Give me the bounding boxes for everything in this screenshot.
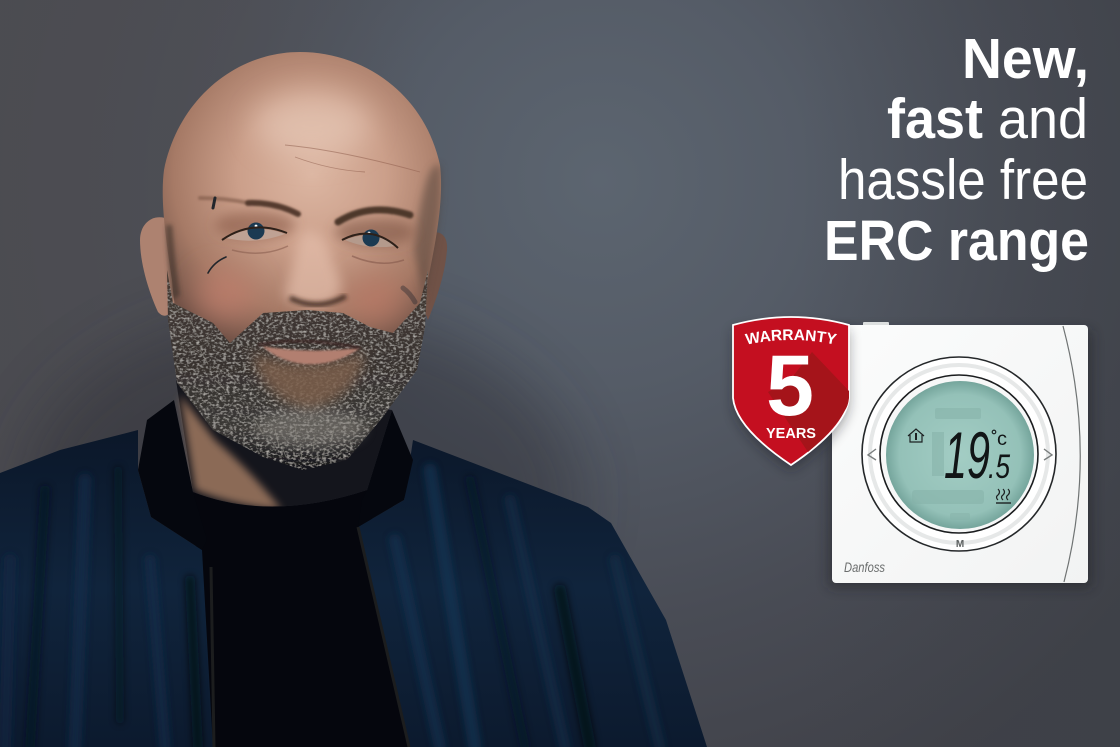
grey chin hairs xyxy=(255,408,365,448)
nose xyxy=(284,231,346,306)
shield xyxy=(733,317,849,465)
line: fast and: fast and xyxy=(887,87,1088,151)
right eye xyxy=(342,230,404,263)
thermostat xyxy=(828,322,1092,588)
zipper left xyxy=(211,567,214,747)
soul patch brown area xyxy=(252,352,365,410)
left ear xyxy=(140,217,175,316)
scar marks xyxy=(208,198,415,302)
Danfoss logo: Danfoss xyxy=(844,559,885,575)
WARRANTY: WARRANTY xyxy=(744,329,838,344)
ghost LCD segments xyxy=(912,408,984,520)
line: ERC range: ERC range xyxy=(824,209,1089,273)
eyebrows xyxy=(200,198,410,222)
ribbed collar xyxy=(138,400,413,550)
dial arrows xyxy=(868,449,1052,460)
dial xyxy=(862,357,1056,551)
warranty badge xyxy=(728,316,857,472)
heat icon xyxy=(996,489,1011,503)
head xyxy=(163,52,441,450)
headline xyxy=(824,27,1089,273)
jacket xyxy=(0,430,707,747)
cheek hair strands xyxy=(190,320,395,460)
head left sideburn shading xyxy=(166,225,180,300)
zipper right xyxy=(358,527,409,747)
head right shading xyxy=(414,165,441,300)
temperature reading: c xyxy=(997,429,1007,450)
forehead wrinkles xyxy=(285,145,420,172)
line: New,: New, xyxy=(962,27,1089,91)
left eye xyxy=(222,222,288,253)
jacket folds xyxy=(5,470,660,747)
top tab xyxy=(863,322,889,327)
numeral 5: 5 xyxy=(766,338,814,434)
temperature reading: .5 xyxy=(988,448,1010,486)
eye sockets xyxy=(215,211,415,246)
device shadow xyxy=(828,330,1092,588)
lips xyxy=(258,341,360,364)
neck xyxy=(176,380,392,510)
person portrait xyxy=(0,52,707,747)
badge shadow xyxy=(733,324,849,471)
home icon xyxy=(908,429,924,442)
YEARS: YEARS xyxy=(766,426,816,442)
temperature reading: 19 xyxy=(944,418,990,492)
side curve xyxy=(1063,326,1080,582)
beard xyxy=(167,270,428,470)
forehead highlight xyxy=(254,93,370,157)
long shadow xyxy=(768,352,850,452)
M label: M xyxy=(956,539,964,550)
cheek colour xyxy=(195,270,403,324)
right ear xyxy=(420,232,447,320)
device body xyxy=(832,325,1088,583)
line: hassle free: hassle free xyxy=(838,148,1088,212)
black t-shirt xyxy=(193,490,415,747)
